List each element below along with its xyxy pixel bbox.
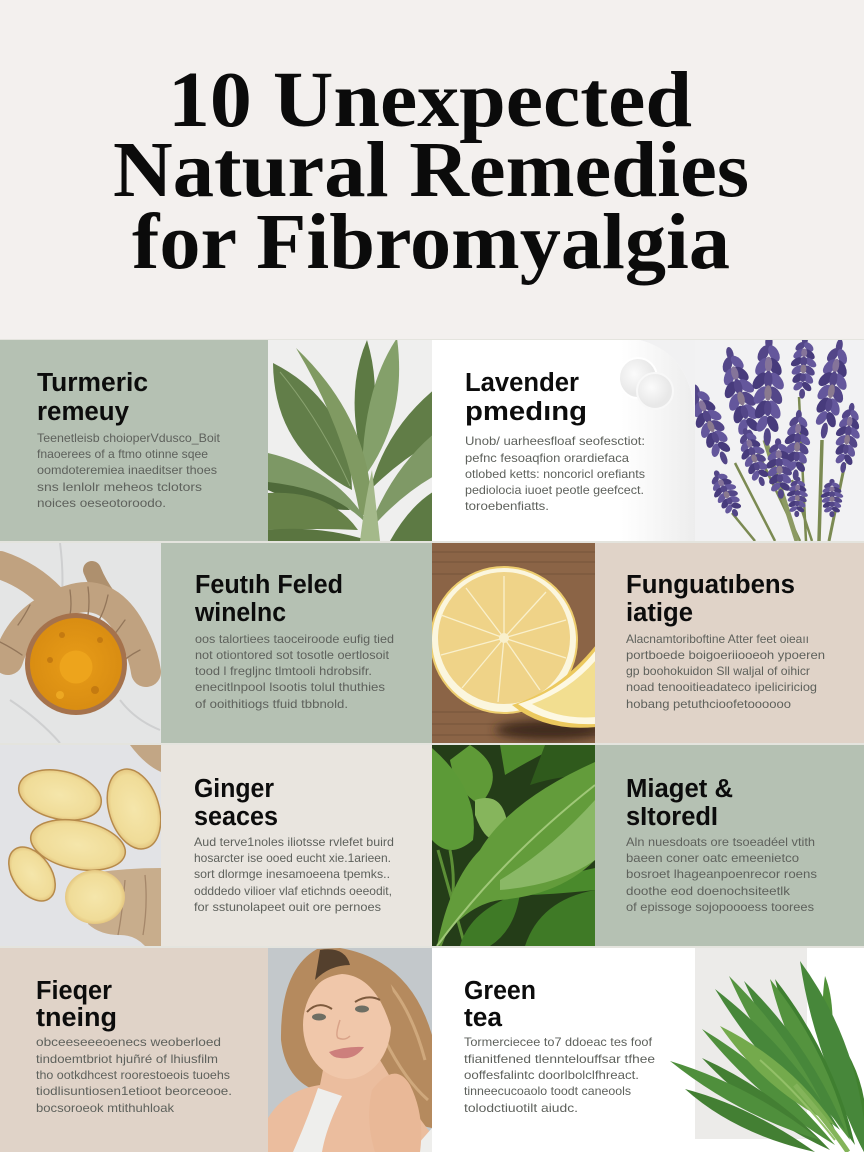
body text: tfianitfened tlenntelouffsar tfhee xyxy=(464,1052,655,1066)
body text: fnaoerees of a ftmo otinne sqee xyxy=(37,447,208,461)
panel: miaget and stored xyxy=(595,745,864,946)
header band xyxy=(0,0,864,339)
body text: gp boohokuidon Sll waljal of oihicr xyxy=(626,664,810,678)
body text: sort dlormge inesamoeena tpemks.. xyxy=(194,867,390,881)
panel: funguatbens iatige xyxy=(595,543,864,743)
body text: Aln nuesdoats ore tsoeadéel vtith xyxy=(626,835,815,849)
body text: pediolocia iuoet peotle geefcect. xyxy=(465,483,644,497)
panel: lavender remedy xyxy=(432,340,695,541)
body text: not otiontored sot tosotle oertlosoit xyxy=(195,648,390,662)
body text xyxy=(465,434,645,513)
body text: for sstunolapeet ouit ore pernoes xyxy=(194,900,381,914)
heading xyxy=(626,775,733,831)
lemon half xyxy=(430,566,578,714)
body text: ooffesfalintc doorlbolclfhreact. xyxy=(464,1068,639,1082)
grey backdrop rectangle xyxy=(695,948,807,1139)
body text xyxy=(464,1035,655,1115)
heading: tea xyxy=(464,1004,503,1032)
body text: tood l fregljnc tlmtooli hdrobsifr. xyxy=(195,664,372,678)
heading: Ginger xyxy=(194,775,274,803)
heading: Funguatıbens xyxy=(626,571,795,599)
panel: green tea xyxy=(432,948,864,1152)
body text xyxy=(194,835,394,914)
body text xyxy=(626,835,817,914)
body text xyxy=(36,1035,232,1115)
slices xyxy=(8,768,161,924)
body text: oos talortiees taoceiroode eufig tied xyxy=(195,632,394,646)
ginger root xyxy=(130,745,161,772)
heading xyxy=(194,775,278,831)
main leaf xyxy=(437,762,595,946)
body text: bosroet lhageanpoenrecor roens xyxy=(626,867,817,881)
image: sliced lemon on wood xyxy=(430,543,605,743)
title: Natural Remedies xyxy=(113,127,749,214)
body text: Tormerciecee to7 ddoeac tes foof xyxy=(464,1035,653,1049)
panel: fresh feed xyxy=(161,543,432,743)
heading: winelnc xyxy=(194,599,286,627)
heading xyxy=(626,571,795,627)
body text: obceeseeeoenecs weoberloed xyxy=(36,1035,221,1049)
panel: ginger seaces xyxy=(161,745,432,946)
heading: Lavender xyxy=(465,369,579,397)
curved shaded backdrop xyxy=(432,340,695,541)
heading xyxy=(464,977,536,1032)
image: ginger slices xyxy=(0,745,170,946)
image: olive green leaves xyxy=(268,338,436,541)
corner shading xyxy=(640,340,695,425)
body text: Alacnamtoriboftine Atter feet oieaıı xyxy=(626,632,809,646)
body text: tiodlisuntiosen1etioot beorceooe. xyxy=(36,1084,232,1098)
title: for Fibromyalgia xyxy=(132,199,730,286)
body text: doothe eod doenochsiteetlk xyxy=(626,884,791,898)
heading: tneing xyxy=(36,1004,117,1032)
heading xyxy=(194,571,343,627)
body text: tho ootkdhcest roorestoeois tuoehs xyxy=(36,1068,230,1082)
heading xyxy=(36,977,117,1032)
lemon wedge xyxy=(512,645,596,728)
panel: fieqer tneing xyxy=(0,948,268,1152)
image: smiling woman xyxy=(268,948,432,1152)
body text: portboede boigoeriiooeoh ypoeren xyxy=(626,648,825,662)
heading: pmedıng xyxy=(465,398,587,426)
heading xyxy=(37,369,148,426)
body text: hobang petuthcioofetoooooo xyxy=(626,697,791,711)
heading: iatige xyxy=(626,599,693,627)
icon: white pebbles xyxy=(619,358,673,409)
body text: Unob/ uarheesfloaf seofesctiot: xyxy=(465,434,645,448)
title xyxy=(113,57,749,286)
heading: remeuy xyxy=(37,398,130,426)
title: 10 Unexpected xyxy=(168,57,692,144)
body text: of ooithitiogs tfuid tbbnold. xyxy=(195,697,348,711)
heading: Fieqer xyxy=(36,977,112,1005)
body text xyxy=(195,632,394,711)
heading: Feutıh Feled xyxy=(195,571,343,599)
heading: Turmeric xyxy=(37,369,148,397)
body text: Aud terve1noles iliotsse rvlefet buird xyxy=(194,835,394,849)
body text: of epissoge sojopoooess toorees xyxy=(626,900,814,914)
body text: baeen coner oatc emeenietco xyxy=(626,851,799,865)
image: turmeric root and bowl xyxy=(0,543,161,743)
body text: hosarcter ise ooed eucht xie.1arieen. xyxy=(194,851,391,865)
stems xyxy=(732,397,845,541)
panel: turmeric remedy xyxy=(0,340,268,541)
body text: tindoemtbriot hjuñré of lhiusfilm xyxy=(36,1052,218,1066)
heading xyxy=(465,369,587,426)
ginger root xyxy=(0,565,146,672)
white tank top xyxy=(293,1088,342,1152)
body text: otlobed ketts: noncoricl orefiants xyxy=(465,467,645,481)
image: lavender sprigs xyxy=(695,340,864,541)
heading: Green xyxy=(464,977,536,1005)
body text: tolodctiuotilt aiudc. xyxy=(464,1101,578,1115)
body and shoulders xyxy=(268,1060,432,1152)
body text: odddedo vilioer vlaf etichnds oeeodit, xyxy=(194,884,392,898)
body text xyxy=(37,431,221,510)
flower spikes xyxy=(695,340,860,518)
body text: oomdoteremiea inaeditser thoes xyxy=(37,463,217,477)
body text: enecitlnpool lsootis tolul thuthies xyxy=(195,680,385,694)
body text xyxy=(626,632,825,711)
hair xyxy=(281,948,432,1128)
body text: toroebenfiatts. xyxy=(465,499,549,513)
body text: sns lenlolr meheos tclotors xyxy=(37,480,202,494)
body text: pefnc fesoaqfion orardiefaca xyxy=(465,451,629,465)
hand at neck xyxy=(389,1074,422,1152)
body text: bocsoroeok mtithuhloak xyxy=(36,1101,175,1115)
heading: Miaget & xyxy=(626,775,733,803)
bowl of turmeric powder xyxy=(25,613,127,715)
face xyxy=(303,949,395,1079)
body text: tinneecucoaolo toodt caneools xyxy=(464,1084,631,1098)
body text: noices oeseotoroodo. xyxy=(37,496,166,510)
image: green basil leaves xyxy=(432,745,595,946)
body text: Teenetleisb choioperVdusco_Boit xyxy=(37,431,221,445)
image: long green leaves xyxy=(670,961,864,1152)
heading: seaces xyxy=(194,803,278,831)
body text: noad tenooitieadateco ipeliciriciog xyxy=(626,680,817,694)
heading: sItoredI xyxy=(626,803,718,831)
